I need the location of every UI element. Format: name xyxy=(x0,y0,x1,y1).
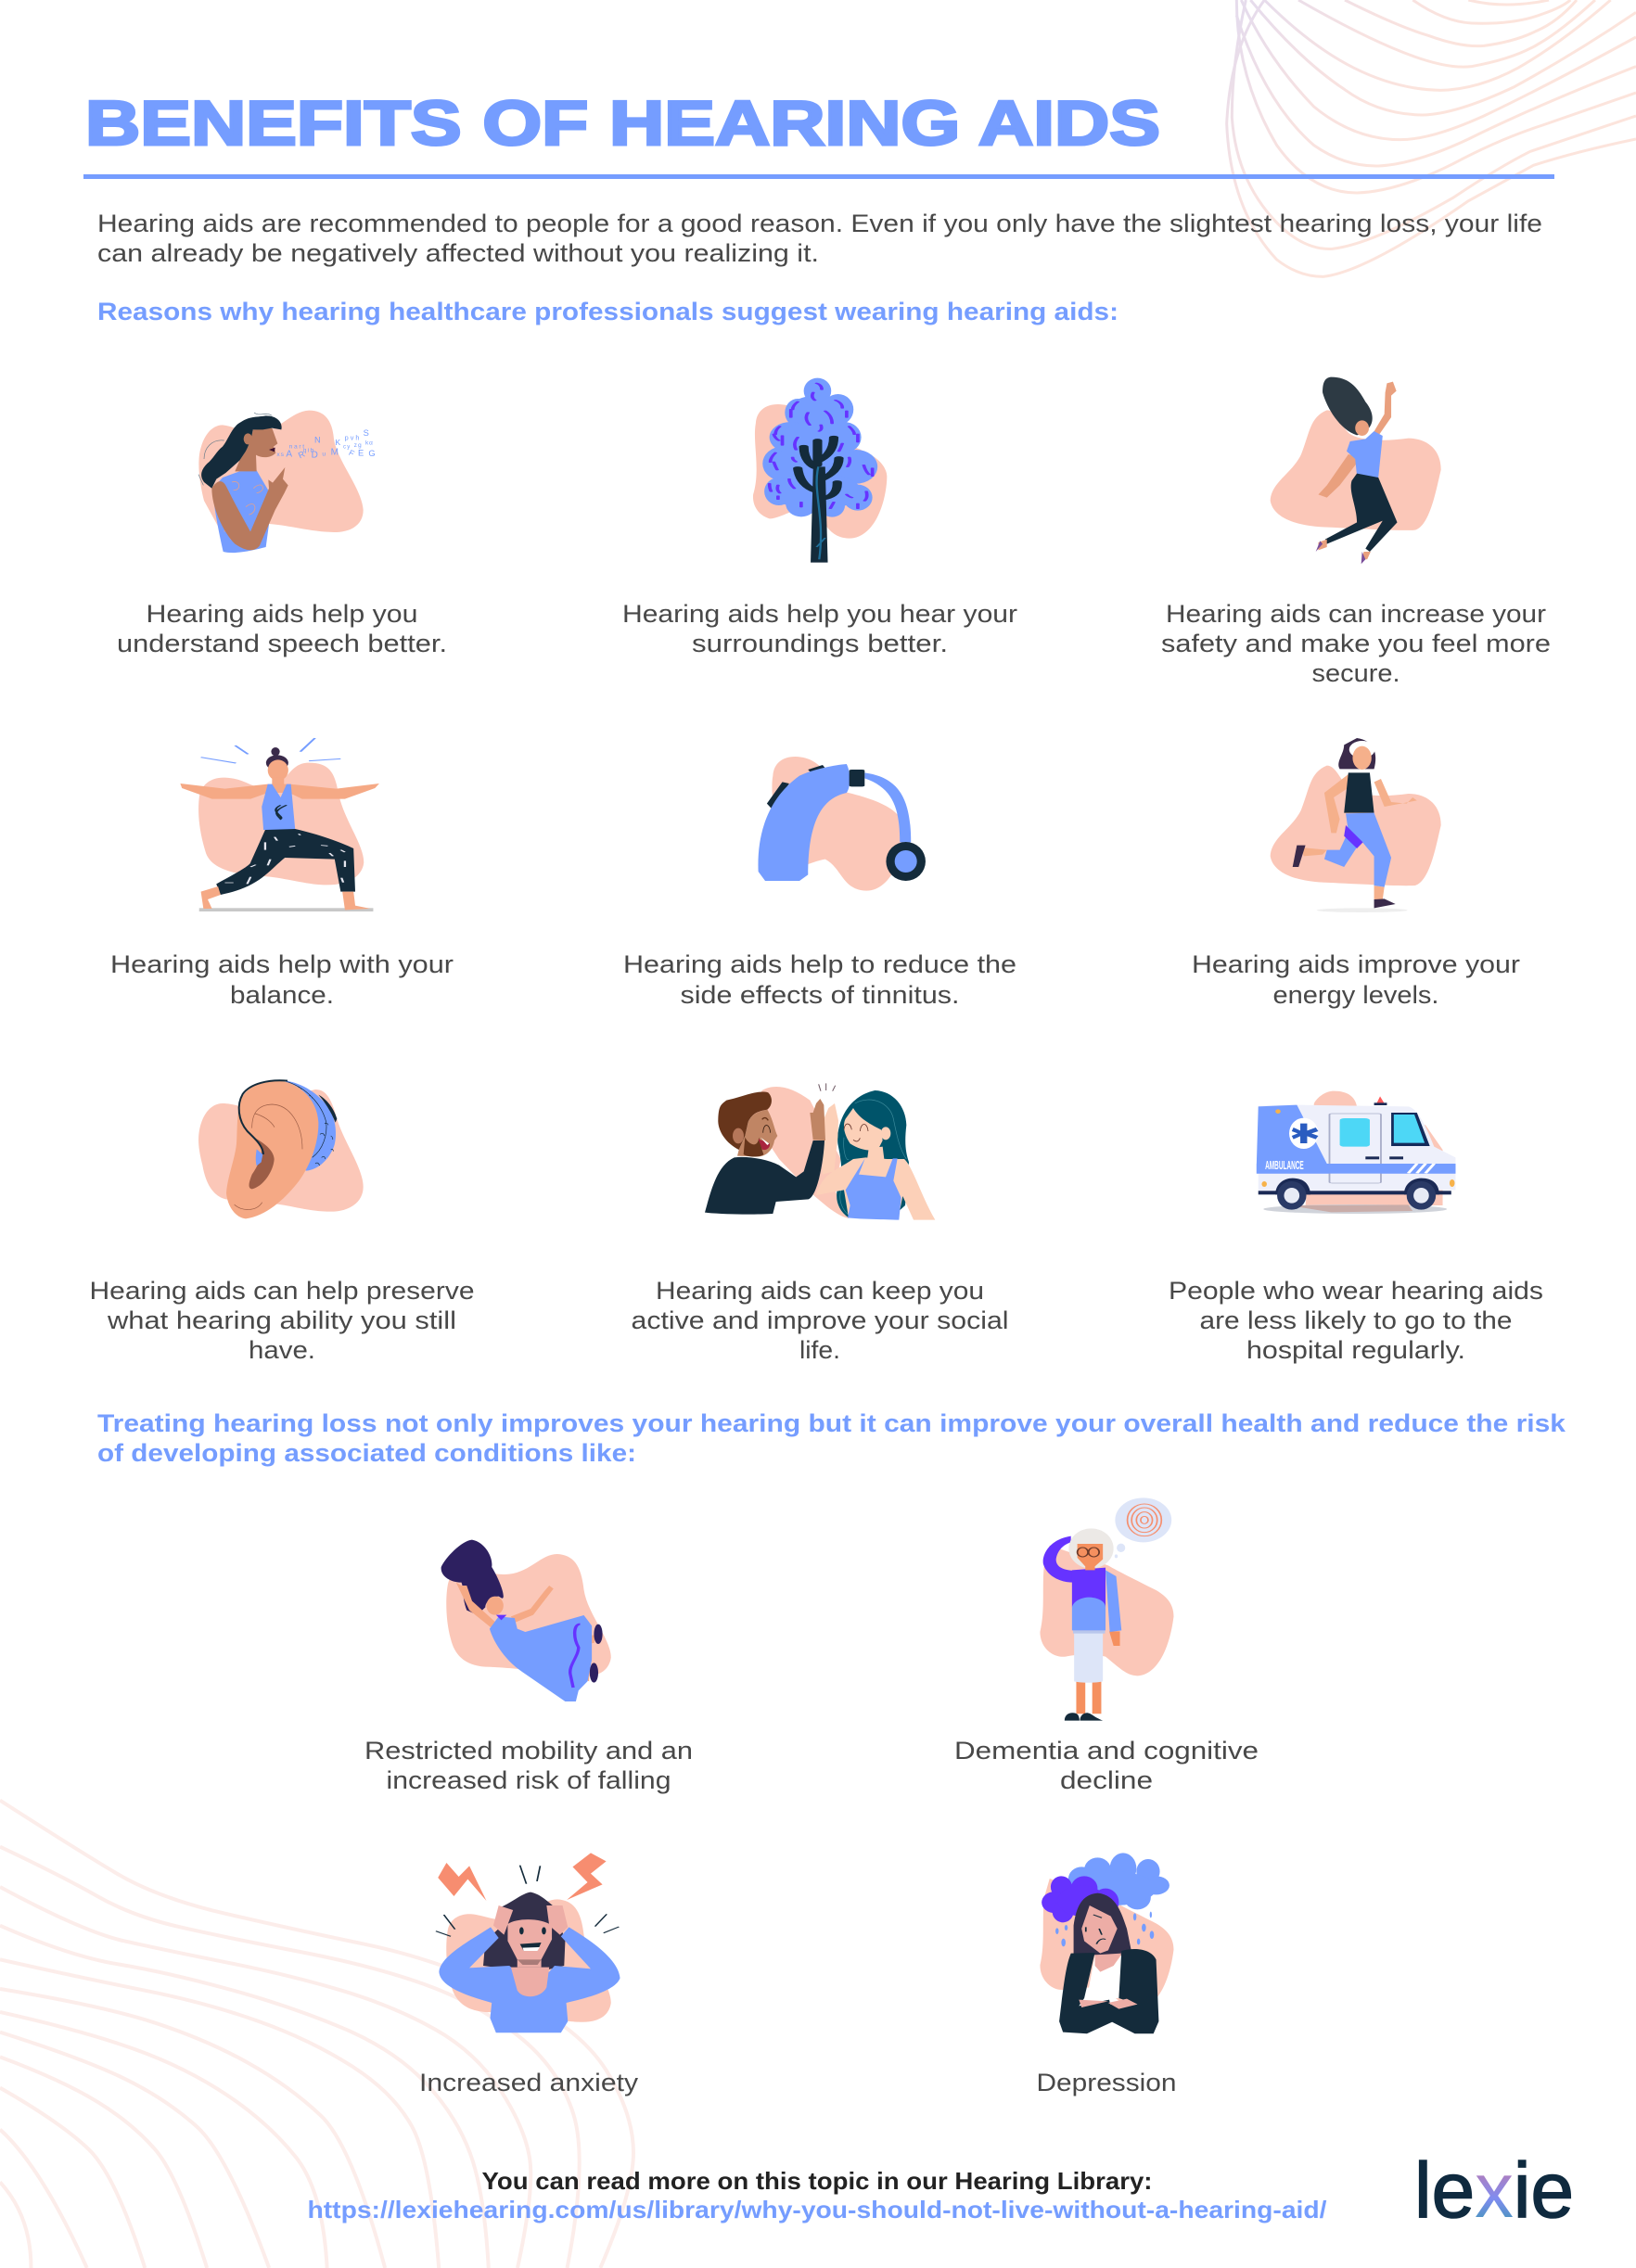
icon: woman speaking: N xyxy=(314,435,321,444)
heading: associated conditions xyxy=(97,1409,1566,1467)
icon: tree xyxy=(753,378,887,563)
caption: speech: Hearing aids help you xyxy=(147,600,417,628)
title: BENEFITS OF HEARING AIDS xyxy=(85,88,1160,159)
caption: surroundings: surroundings better. xyxy=(692,630,948,657)
caption: falling: increased risk of falling xyxy=(386,1766,671,1794)
caption: safety: secure. xyxy=(1311,659,1400,687)
heading: reasons: Reasons why hearing healthcare professionals suggest wearing hearing aids: xyxy=(97,298,1118,325)
caption: falling: Restricted mobility and an xyxy=(364,1737,693,1765)
icon: woman running xyxy=(1271,738,1441,912)
caption: balance: Hearing aids help with your xyxy=(110,950,454,978)
icon: two friends high-five xyxy=(705,1083,935,1220)
icon: woman speaking: qib xyxy=(303,447,315,453)
caption: energy xyxy=(1192,950,1520,1009)
caption: social life: life. xyxy=(799,1336,840,1364)
icon: woman speaking: u xyxy=(322,451,326,457)
caption: tinnitus: side effects of tinnitus. xyxy=(681,981,959,1009)
caption: surroundings: Hearing aids help you hear your xyxy=(622,600,1017,628)
footer: read more link xyxy=(308,2167,1326,2223)
icon: ambulance xyxy=(1257,1091,1455,1214)
icon: woman speaking: E xyxy=(358,449,364,458)
icon: woman speaking: F xyxy=(347,448,356,458)
caption: hospital: are less likely to go to the xyxy=(1200,1306,1512,1334)
caption: safety xyxy=(1161,600,1551,687)
intro text: can already be negatively affected without you realizing it. xyxy=(97,239,819,267)
caption: energy: Hearing aids improve your xyxy=(1192,950,1520,978)
caption: energy: energy levels. xyxy=(1272,981,1439,1009)
icon: woman speaking xyxy=(198,411,376,553)
caption: preserve hearing: Hearing aids can help preserve xyxy=(89,1277,475,1305)
intro text xyxy=(97,210,1542,267)
icon: anxious woman xyxy=(436,1853,620,2032)
icon: woman jumping xyxy=(1271,377,1441,564)
icon: woman speaking: pvh xyxy=(345,434,361,442)
icon: woman speaking: kα xyxy=(365,440,374,446)
icon: woman speaking: R xyxy=(297,449,307,460)
icon: ambulance: AMBULANCE xyxy=(1265,1158,1304,1172)
footer: read more link: https://lexiehearing.com/us/library/why-you-should-not-live-without-a-hearing-aid/ xyxy=(308,2196,1326,2223)
caption: surroundings xyxy=(622,600,1017,657)
caption: speech xyxy=(117,600,447,657)
caption: dementia: decline xyxy=(1060,1766,1153,1794)
caption: tinnitus: Hearing aids help to reduce the xyxy=(623,950,1016,978)
icon: woman speaking: G xyxy=(368,449,376,458)
caption: preserve hearing xyxy=(89,1277,475,1364)
caption: hospital xyxy=(1169,1277,1543,1364)
caption: dementia: Dementia and cognitive xyxy=(954,1737,1259,1765)
caption: dementia xyxy=(954,1737,1259,1794)
caption: safety: safety and make you feel more xyxy=(1161,630,1551,657)
icon: woman speaking: zg xyxy=(354,442,363,449)
caption: anxiety: Increased anxiety xyxy=(419,2069,639,2096)
heading: associated conditions: of developing associated conditions like: xyxy=(97,1439,636,1467)
caption: social life: active and improve your social xyxy=(631,1306,1009,1334)
icon: elderly woman confused xyxy=(1040,1497,1174,1721)
icon: woman speaking: cy xyxy=(343,444,351,450)
intro text: Hearing aids are recommended to people for a good reason. Even if you only have the slightest hearing loss, your life xyxy=(97,210,1542,237)
icon: yoga balance pose xyxy=(180,738,379,911)
caption: preserve hearing: what hearing ability you still xyxy=(107,1306,456,1334)
icon: ear with hearing aid xyxy=(198,1080,364,1218)
caption: social life: Hearing aids can keep you xyxy=(656,1277,984,1305)
caption: preserve hearing: have. xyxy=(249,1336,315,1364)
icon: woman speaking: S xyxy=(364,428,369,438)
caption: hospital: People who wear hearing aids xyxy=(1169,1277,1543,1305)
icon: woman speaking: nart xyxy=(289,443,306,450)
footer: read more link: You can read more on this topic in our Hearing Library: xyxy=(482,2167,1152,2195)
icon: hearing aid device xyxy=(758,757,926,891)
icon: woman speaking: K xyxy=(335,438,340,447)
icon: woman falling xyxy=(441,1540,611,1701)
caption: social life xyxy=(631,1277,1009,1364)
caption: speech: understand speech better. xyxy=(117,630,447,657)
icon: depressed woman under clouds xyxy=(1040,1853,1174,2033)
icon: woman speaking: A xyxy=(286,450,292,460)
icon: woman speaking: D xyxy=(312,450,318,460)
caption: safety: Hearing aids can increase your xyxy=(1166,600,1546,628)
caption: hospital: hospital regularly. xyxy=(1246,1336,1465,1364)
caption: falling xyxy=(364,1737,693,1794)
logo: lexie: lexie xyxy=(1414,2147,1574,2234)
caption: balance: balance. xyxy=(230,981,334,1009)
caption: balance xyxy=(110,950,454,1009)
icon: woman speaking: M xyxy=(331,448,339,458)
heading: associated conditions: Treating hearing loss not only improves your hearing but it can improve your overall health and reduce the risk xyxy=(97,1409,1566,1437)
caption: tinnitus xyxy=(623,950,1016,1009)
caption: depression: Depression xyxy=(1037,2069,1176,2096)
icon: woman speaking: xs xyxy=(276,452,285,458)
